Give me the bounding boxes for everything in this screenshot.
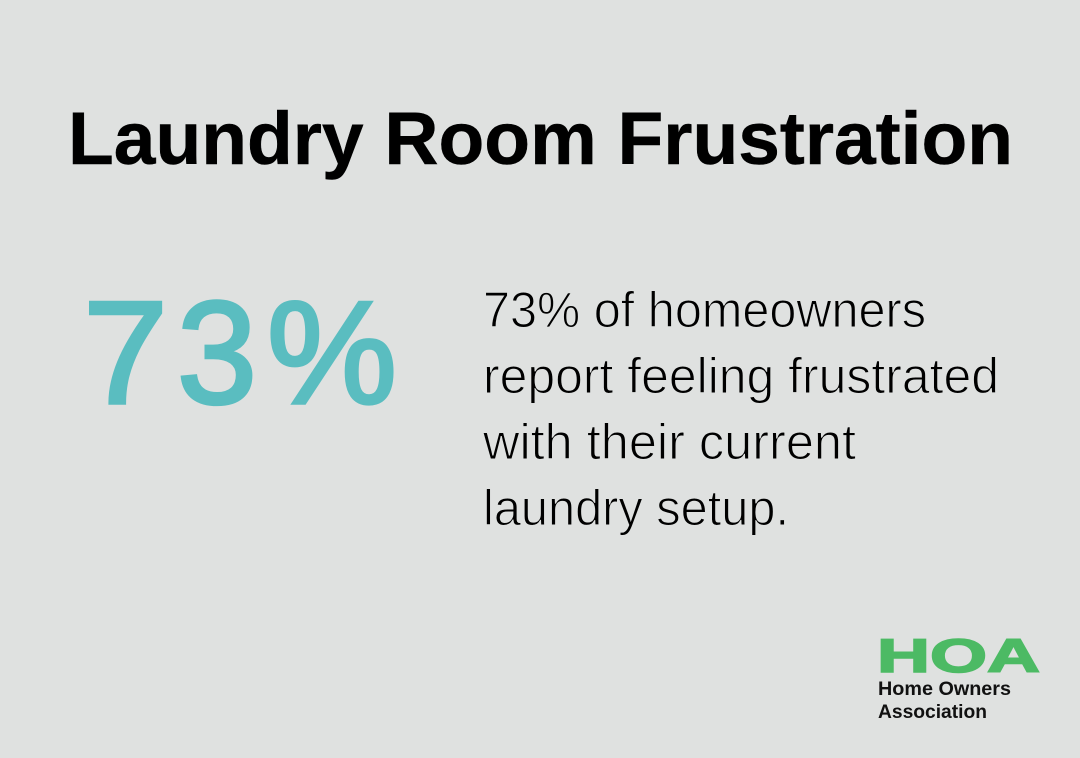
description text: 73% of homeowners [483, 282, 926, 338]
logo name: Home Owners [878, 679, 1011, 700]
logo name: Association [878, 702, 987, 723]
logo: Home Owners Association [877, 629, 1040, 723]
big statistic: 73%: % [267, 271, 397, 434]
title: Laundry Room Frustration [68, 97, 1013, 180]
logo mark: HOA: HOA [877, 629, 1040, 682]
description text: with their current [482, 414, 856, 470]
description text: report feeling frustrated [483, 348, 999, 404]
description text: laundry setup. [483, 480, 789, 536]
logo name [878, 679, 1011, 723]
big statistic: 73%: 3 [177, 271, 257, 434]
description text [482, 282, 999, 536]
big statistic: 73% [83, 271, 397, 434]
big statistic: 73%: 7 [83, 271, 168, 434]
